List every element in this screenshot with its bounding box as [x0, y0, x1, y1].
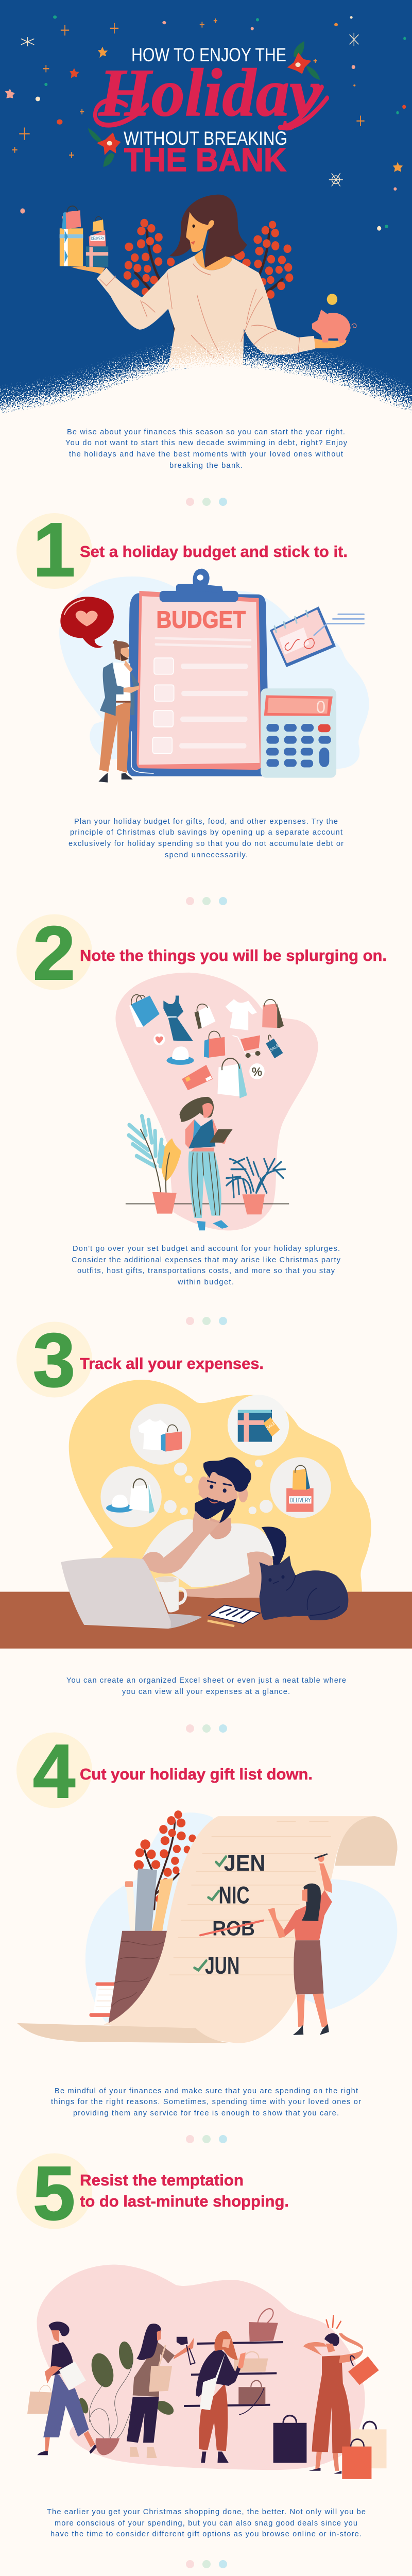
laptop	[61, 1557, 202, 1629]
items in bubbles	[106, 1410, 314, 1513]
man shirt	[142, 1519, 274, 1587]
number badge 2: 2	[33, 911, 75, 996]
heading 1: Set a holiday budget and stick to it.	[80, 543, 348, 561]
woman with tablet	[179, 1097, 233, 1230]
intro text: Be wise about your finances this season so you can start the year right.	[67, 428, 345, 436]
number badge 5	[16, 2151, 92, 2236]
body text 5: The earlier you get your Christmas shopping done, the better. Not only will you be	[47, 2508, 366, 2516]
intro text: the holidays and have the best moments with your loved ones without	[69, 450, 343, 459]
orange bag	[342, 2439, 371, 2479]
illustration: gift list scroll	[17, 1810, 398, 2043]
number badge 3: 3	[33, 1318, 75, 1403]
names list: JUN	[205, 1953, 239, 1979]
body text 2: within budget.	[177, 1278, 234, 1286]
stressed shopper	[303, 2315, 379, 2473]
body text 2: Consider the additional expenses that may arise like Christmas party	[72, 1256, 341, 1264]
body text 4: providing them any service for free is enough to show that you care.	[73, 2109, 339, 2117]
section 5: last-minute shopping	[16, 2151, 387, 2568]
divider dots	[186, 2135, 227, 2143]
number badge 2	[16, 911, 92, 996]
woman writing	[268, 1854, 332, 2035]
number badge 1	[16, 507, 92, 592]
heading 5: Resist the temptation	[80, 2171, 244, 2189]
shopper at shelf	[196, 2331, 246, 2463]
cat	[260, 1556, 348, 1620]
section 1: budget	[16, 507, 369, 905]
decorative stars and dots	[5, 15, 406, 231]
title line: without breaking: WITHOUT BREAKING	[124, 128, 287, 149]
body text 2: Don't go over your set budget and account for your holiday splurges.	[73, 1245, 340, 1253]
divider dots	[186, 897, 227, 905]
body text 4	[51, 2087, 361, 2117]
number badge 4	[16, 1729, 92, 1814]
man head and arm	[142, 1457, 273, 1598]
heading 4: Cut your holiday gift list down.	[80, 1765, 313, 1783]
plant	[77, 2340, 176, 2455]
poinsettia top	[287, 41, 320, 80]
body text 1: exclusively for holiday spending so that you do not accumulate debt or	[68, 840, 344, 848]
floating shopping items	[129, 995, 284, 1098]
number badge 3	[16, 1318, 92, 1403]
body text 4: things for the right reasons. Sometimes, spending time with your loved ones or	[51, 2098, 361, 2106]
poinsettia bottom	[88, 128, 121, 167]
names list	[205, 1851, 265, 1979]
heading 3: Track all your expenses.	[80, 1354, 264, 1372]
body text 2: outfits, host gifts, transportations costs, and more so that you stay	[77, 1267, 335, 1275]
title line: the bank: THE BANK	[124, 141, 286, 178]
panel: hero header	[0, 0, 412, 479]
names list: JEN	[224, 1851, 265, 1876]
shopper walking	[27, 2321, 97, 2455]
clipboard	[127, 569, 269, 776]
number badge 4: 4	[33, 1729, 75, 1814]
divider dots	[186, 498, 227, 506]
gifts on hand: DELIVERY	[91, 236, 105, 241]
divider dots	[186, 2560, 227, 2568]
pink blob	[37, 2265, 365, 2470]
body text 3	[66, 1676, 346, 1696]
items in bubbles: DELIVERY	[290, 1497, 311, 1504]
names list: ROB	[212, 1918, 255, 1940]
intro text: breaking the bank.	[169, 462, 243, 470]
calculator	[261, 688, 336, 778]
notebook and pencil	[208, 1605, 260, 1626]
pink blob	[115, 973, 318, 1230]
calculator: 0	[316, 697, 325, 717]
number badge 1: 1	[33, 507, 75, 592]
intro text	[65, 428, 348, 470]
chair	[262, 1527, 286, 1568]
section 2: splurges	[16, 911, 387, 1325]
woman: hair	[169, 195, 247, 268]
check marks	[195, 1857, 226, 1970]
mug	[155, 1576, 185, 1613]
snow hill	[0, 358, 412, 479]
body text 4: Be mindful of your finances and make sure that you are spending on the right	[55, 2087, 358, 2095]
number badge 5: 5	[33, 2151, 75, 2236]
piggy bank and coin	[312, 294, 356, 344]
wood pot	[109, 1931, 167, 2023]
names list: NIC	[218, 1882, 250, 1909]
body text 5	[47, 2508, 366, 2538]
floating shopping items: %	[252, 1064, 262, 1079]
plant right	[227, 1158, 285, 1214]
section 4: gift list	[16, 1729, 398, 2143]
clipboard: BUDGET	[157, 607, 246, 633]
speech bubble with heart	[60, 597, 114, 648]
section 3: tracking	[0, 1318, 412, 1733]
divider dots	[186, 1317, 227, 1325]
body text 5: have the time to consider different gift options as you browse online or in-store.	[50, 2530, 362, 2538]
thought bubbles	[100, 1395, 331, 1527]
yellow blob	[69, 1380, 371, 1592]
title script: holiday: Holiday	[98, 55, 319, 130]
intro text: You do not want to start this new decade swimming in debt, right? Enjoy	[65, 439, 348, 447]
berry branches	[124, 219, 293, 335]
bags on floor	[273, 2416, 387, 2468]
table	[0, 1592, 412, 1649]
illustration: shopping items and woman	[115, 973, 318, 1230]
calendar	[270, 606, 364, 667]
illustration: budget clipboard	[59, 569, 369, 783]
books	[89, 1982, 116, 2017]
shelves and bags	[184, 2309, 283, 2415]
plant left	[129, 1116, 181, 1214]
items in bubbles: SALE	[266, 1420, 277, 1431]
illustration: woman balancing gifts and piggy bank	[60, 41, 356, 368]
berry branch	[134, 1810, 196, 1909]
scroll body	[17, 1816, 398, 2043]
heading 5	[80, 2171, 289, 2210]
pale blue blob	[59, 577, 369, 769]
body text 5: more conscious of your spending, but you can also snag good deals since you	[55, 2519, 357, 2528]
hero background	[0, 0, 412, 420]
man thinking	[98, 640, 139, 783]
gifts on hand	[60, 206, 108, 267]
floating shopping items: SALE	[269, 1043, 280, 1053]
body text 1: spend unnecessarily.	[165, 851, 248, 859]
blue blobs	[85, 1812, 213, 2022]
heading 2: Note the things you will be splurging on.	[80, 946, 387, 964]
body text 1	[68, 818, 344, 859]
woman: hands	[71, 266, 105, 275]
woman: face and neck	[186, 212, 214, 252]
illustration: shoppers	[27, 2265, 387, 2479]
body text 2	[72, 1245, 341, 1286]
ground line	[126, 1203, 289, 1205]
divider dots	[186, 1724, 227, 1733]
body text 1: Plan your holiday budget for gifts, food, and other expenses. Try the	[74, 818, 338, 826]
body text 3: you can view all your expenses at a glance.	[122, 1688, 290, 1696]
body text 3: You can create an organized Excel sheet or even just a neat table where	[66, 1676, 346, 1685]
shopper with camera bag	[127, 2324, 195, 2458]
illustration: man thinking of expenses	[0, 1380, 412, 1649]
heading 5: to do last-minute shopping.	[80, 2192, 289, 2210]
title line: how to enjoy the: HOW TO ENJOY THE	[131, 44, 286, 65]
woman: sweater	[97, 256, 315, 368]
body text 1: principle of Christmas club savings by opening up a separate account	[70, 828, 342, 837]
pencil ruler pen	[125, 1869, 174, 1931]
